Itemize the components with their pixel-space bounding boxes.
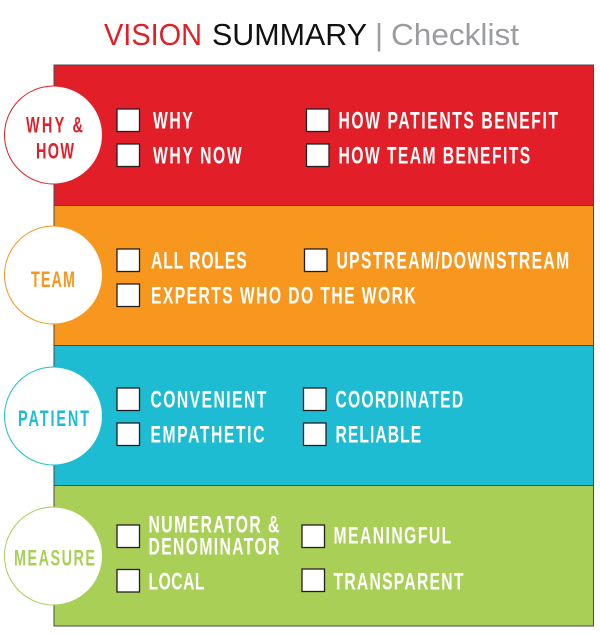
- label: convenient: CONVENIENT: [150, 386, 267, 413]
- title: Checklist: [391, 17, 519, 52]
- badge: measure: [4, 507, 102, 605]
- label: upstream/downstream: UPSTREAM/DOWNSTREAM: [336, 247, 569, 274]
- badge: why and how: HOW: [36, 139, 74, 164]
- checkbox: reliable: [304, 423, 326, 446]
- badge: why and how: WHY &: [26, 114, 83, 139]
- title: [104, 17, 519, 52]
- badge: team: [4, 226, 102, 324]
- checkbox: how patients benefit: [306, 109, 329, 132]
- title: VISION: [104, 17, 202, 52]
- checkbox: why now: [117, 144, 140, 166]
- checkbox: why: [117, 109, 140, 132]
- checkbox: all roles: [117, 249, 140, 272]
- checkbox: how team benefits: [306, 144, 329, 166]
- checkbox: numerator and denominator: [117, 525, 140, 548]
- panel: team: [54, 206, 594, 346]
- panel: patient: [54, 346, 594, 486]
- label: meaningful: MEANINGFUL: [334, 522, 451, 549]
- badge: why and how: [4, 86, 102, 184]
- checkbox: upstream/downstream: [304, 249, 327, 272]
- checkbox: empathetic: [117, 423, 140, 446]
- checkbox: coordinated: [304, 388, 326, 410]
- badge: measure: MEASURE: [14, 547, 95, 572]
- checkbox: convenient: [117, 388, 140, 410]
- label: why: WHY: [153, 107, 193, 134]
- checkbox: experts: [117, 284, 140, 306]
- label: reliable: RELIABLE: [336, 421, 421, 448]
- label: numerator and denominator: [148, 511, 279, 560]
- label: local: LOCAL: [148, 568, 205, 595]
- label: coordinated: COORDINATED: [336, 386, 463, 413]
- label: experts: EXPERTS WHO DO THE WORK: [151, 282, 416, 309]
- checkbox: local: [117, 570, 140, 592]
- badge: patient: [4, 367, 102, 465]
- badge: patient: PATIENT: [18, 407, 89, 432]
- panel: why and how: [54, 65, 594, 206]
- panel: measure: [54, 486, 594, 626]
- checkbox: transparent: [302, 569, 324, 592]
- label: how patients benefit: HOW PATIENTS BENEFIT: [338, 107, 558, 134]
- label: numerator and denominator: DENOMINATOR: [148, 533, 279, 560]
- label: empathetic: EMPATHETIC: [150, 421, 265, 448]
- label: how team benefits: HOW TEAM BENEFITS: [338, 142, 530, 169]
- title: |: [375, 17, 383, 52]
- title: SUMMARY: [212, 17, 367, 52]
- label: why now: WHY NOW: [153, 142, 242, 169]
- label: transparent: TRANSPARENT: [334, 568, 464, 595]
- label: numerator and denominator: NUMERATOR &: [148, 511, 279, 538]
- label: all roles: ALL ROLES: [151, 247, 247, 274]
- badge: team: TEAM: [31, 268, 75, 293]
- checkbox: meaningful: [302, 525, 324, 548]
